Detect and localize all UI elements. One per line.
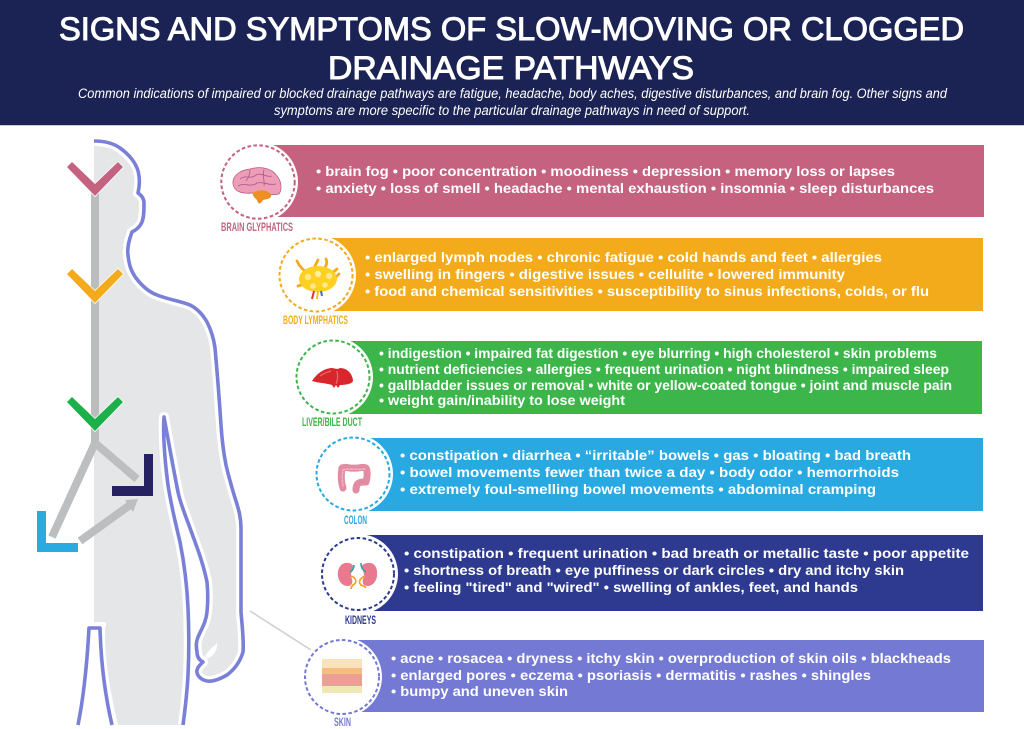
- panel: brain glymphatics: [218, 142, 984, 234]
- symptoms: colon: [400, 447, 911, 497]
- title: [59, 11, 964, 86]
- subtitle: symptoms are more specific to the particular drainage pathways in need of support.: [274, 103, 750, 118]
- body outline: [78, 141, 243, 725]
- symptoms: kidneys: • feeling "tired" and "wired" • swelling of ankles, feet, and hands: [404, 579, 858, 595]
- icon: skin layers: [322, 659, 362, 693]
- symptoms: liver: • gallbladder issues or removal • white or yellow-coated tongue • joint and muscle pain: [379, 377, 952, 393]
- symptoms: colon: • constipation • diarrhea • “irritable” bowels • gas • bloating • bad breath: [400, 447, 911, 463]
- symptoms: lymphatics: • swelling in fingers • digestive issues • cellulite • lowered immunity: [365, 266, 845, 282]
- symptoms: skin: • enlarged pores • eczema • psoriasis • dermatitis • rashes • shingles: [391, 667, 871, 683]
- icon: lymph node: [297, 259, 339, 299]
- symptoms: liver: • indigestion • impaired fat digestion • eye blurring • high cholesterol • skin problems: [379, 345, 937, 361]
- panel: liver and bile duct: [293, 337, 982, 429]
- symptoms: brain: • brain fog • poor concentration • moodiness • depression • memory loss or lapses: [316, 163, 895, 179]
- arrow: colon to kidneys: [80, 499, 138, 541]
- label: brain glymphatics: BRAIN GLYPHATICS: [221, 222, 293, 234]
- icon: kidneys: [338, 563, 377, 589]
- panel: skin: [302, 637, 984, 729]
- header banner: [0, 0, 1024, 125]
- symptoms: kidneys: • shortness of breath • eye puffiness or dark circles • dry and itchy skin: [404, 562, 904, 578]
- symptoms: colon: • extremely foul-smelling bowel movements • abdominal cramping: [400, 481, 876, 497]
- label: kidneys: KIDNEYS: [345, 615, 376, 627]
- flow lines: [52, 190, 138, 541]
- symptoms: liver: [379, 345, 952, 408]
- title: SIGNS AND SYMPTOMS OF SLOW-MOVING OR CLOGGED: [59, 11, 964, 47]
- symptoms: colon: • bowel movements fewer than twice a day • body odor • hemorrhoids: [400, 464, 899, 480]
- label: body lymphatics: BODY LYMPHATICS: [283, 315, 348, 327]
- body silhouette: [78, 141, 243, 725]
- icon: brain: [233, 168, 281, 203]
- chevron: kidneys corner: [112, 454, 153, 496]
- symptoms: brain: • anxiety • loss of smell • headache • mental exhaustion • insomnia • sleep disturbances: [316, 180, 934, 196]
- label: colon: COLON: [344, 515, 367, 527]
- symptoms: lymphatics: [365, 249, 929, 299]
- symptoms: lymphatics: • enlarged lymph nodes • chronic fatigue • cold hands and feet • allergies: [365, 249, 882, 265]
- symptoms: lymphatics: • food and chemical sensitivities • susceptibility to sinus infections, colds, or flu: [365, 283, 929, 299]
- subtitle: [78, 86, 947, 118]
- title: DRAINAGE PATHWAYS: [328, 50, 694, 86]
- panel: kidneys: [318, 534, 983, 627]
- symptoms: liver: • nutrient deficiencies • allergies • frequent urination • night blindness • impaired sleep: [379, 361, 949, 377]
- panel: body lymphatics: [276, 235, 983, 327]
- panel: colon: [313, 434, 983, 527]
- symptoms: brain: [316, 163, 934, 196]
- subtitle: Common indications of impaired or blocked drainage pathways are fatigue, headache, body aches, digestive disturbances, and brain fog. Other signs and: [78, 86, 947, 101]
- symptoms: skin: [391, 650, 951, 699]
- icon: liver: [312, 368, 353, 388]
- symptoms: kidneys: • constipation • frequent urination • bad breath or metallic taste • poor appetite: [404, 545, 969, 561]
- symptoms: skin: • bumpy and uneven skin: [391, 683, 568, 699]
- label: liver/bile duct: LIVER/BILE DUCT: [302, 417, 362, 429]
- symptoms: skin: • acne • rosacea • dryness • itchy skin • overproduction of skin oils • blackheads: [391, 650, 951, 666]
- label: skin: SKIN: [334, 717, 351, 729]
- chevron: brain: [67, 162, 123, 196]
- chevron: colon corner: [37, 511, 78, 552]
- symptoms: liver: • weight gain/inability to lose weight: [379, 392, 625, 408]
- symptoms: kidneys: [404, 545, 969, 595]
- icon: colon: [341, 467, 367, 490]
- connector to skin: [250, 611, 311, 650]
- chevron: liver: [67, 397, 123, 431]
- chevron: lymphatics: [67, 269, 123, 303]
